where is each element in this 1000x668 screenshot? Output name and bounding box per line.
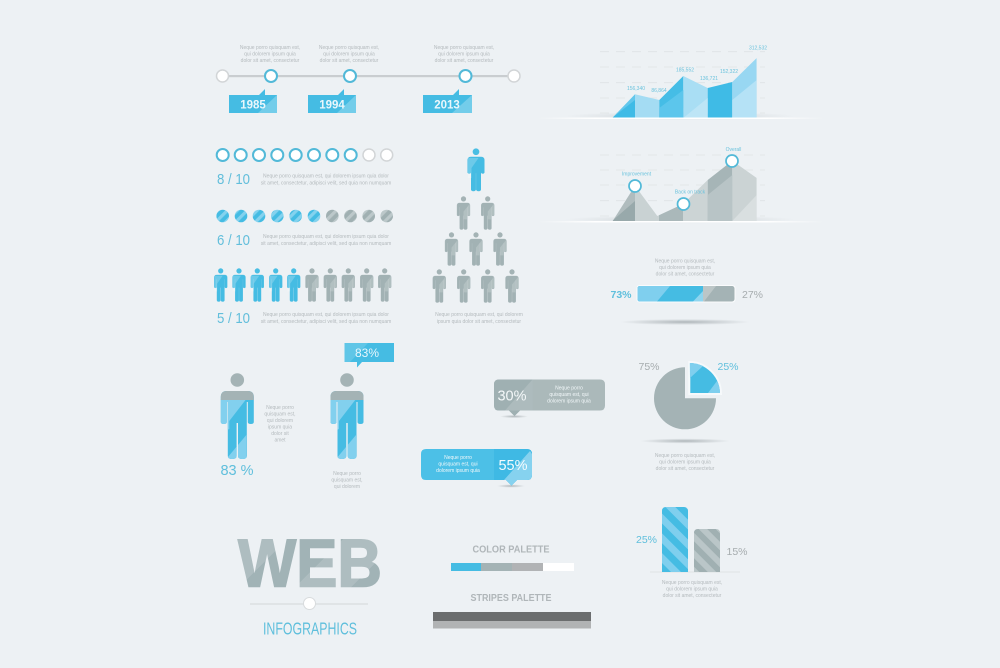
pie slice 25% <box>689 362 721 394</box>
large person with bubble <box>330 343 394 490</box>
rating: 8 of 10: sit amet, consectetur, adipisci velit, sed quia non numquam <box>261 180 391 186</box>
bar chart: 25% <box>636 534 657 546</box>
callout 30%: quisquam est, qui <box>549 392 589 398</box>
bubble 83%: 83% <box>355 346 379 360</box>
timeline text 2013: qui dolorem ipsum quia <box>438 52 490 58</box>
large person 83 percent: ipsum quia <box>268 424 292 430</box>
large person with bubble: Neque porro <box>333 471 361 477</box>
year tag 1985: 1985 <box>240 100 266 112</box>
rating: 8 of 10: 8 / 10 <box>217 171 250 188</box>
pie chart: Neque porro quisquam est, <box>655 453 715 459</box>
year tag 1994 <box>308 89 356 113</box>
year tag 2013: 2013 <box>434 100 460 112</box>
large person 83 percent: quisquam est, <box>264 412 296 418</box>
timeline <box>216 45 520 113</box>
timeline text 1985: Neque porro quisquam est, <box>240 45 300 51</box>
color palette: COLOR PALETTE <box>472 544 550 556</box>
rating: 6 of 10: sit amet, consectetur, adipisci velit, sed quia non numquam <box>261 241 391 247</box>
rating: 5 of 10 people: 5 / 10 <box>217 310 250 327</box>
large person 83 percent: 83 % <box>220 463 254 479</box>
timeline blue nodes <box>265 70 472 82</box>
chart value labels: 86,864 <box>651 88 667 94</box>
people pyramid: Neque porro quisquam est, qui dolorem <box>435 312 523 318</box>
pie chart: 75% <box>638 361 660 373</box>
timeline text 1994: dolor sit amet, consectetur <box>320 58 379 64</box>
people pyramid <box>433 148 523 325</box>
callout 55%: 55% <box>498 458 528 474</box>
large person 83 percent <box>220 373 296 479</box>
callout 30% <box>494 380 605 418</box>
callout 55%: Neque porro <box>444 455 472 461</box>
chart value labels: 312,532 <box>749 46 767 52</box>
timeline text 1985: dolor sit amet, consectetur <box>241 58 300 64</box>
large person with bubble: quisquam est, <box>331 478 363 484</box>
rating: 5 of 10 people: sit amet, consectetur, adipisci velit, sed quia non numquam <box>261 319 391 325</box>
chart marker labels: Improvement <box>622 172 652 178</box>
large person 83 percent: amet <box>274 438 286 444</box>
callout 30%: dolorem ipsum quia <box>547 398 591 404</box>
chart markers <box>629 155 738 210</box>
rating: 6 of 10: Neque porro quisquam est, qui dolorem ipsum quia dolor <box>263 234 389 240</box>
progress bar 73 / 27 <box>610 258 763 325</box>
timeline text 2013 <box>434 45 494 64</box>
callout 30%: 30% <box>497 388 527 404</box>
timeline text 1985 <box>240 45 300 64</box>
rating: 8 of 10 <box>217 149 393 188</box>
timeline text 1994: qui dolorem ipsum quia <box>323 52 375 58</box>
rating: 8 of 10: Neque porro quisquam est, qui dolorem ipsum quia dolor <box>263 174 389 180</box>
rating: 5 of 10 people <box>214 268 391 327</box>
timeline end nodes <box>216 70 520 82</box>
rating: 6 of 10 <box>216 210 393 249</box>
callout 55%: quisquam est, qui <box>438 462 478 468</box>
pie chart: dolor sit amet, consectetur <box>656 466 715 472</box>
progress bar 73 / 27: dolor sit amet, consectetur <box>656 272 715 278</box>
bubble 83% <box>344 343 394 368</box>
timeline text 1994: Neque porro quisquam est, <box>319 45 379 51</box>
chart value labels: 152,322 <box>720 69 738 75</box>
chart marker labels: Overall <box>726 147 741 153</box>
bar chart <box>636 507 748 599</box>
callout 55%: dolorem ipsum quia <box>436 468 480 474</box>
bar chart: Neque porro quisquam est, <box>662 580 722 586</box>
bar chart: 15% <box>726 546 748 558</box>
color palette <box>451 544 574 571</box>
year tag 1985 <box>229 89 277 113</box>
large person 83 percent: Neque porro <box>266 405 294 411</box>
progress bar 73 / 27: qui dolorem ipsum quia <box>659 265 711 271</box>
bar chart: qui dolorem ipsum quia <box>666 586 718 592</box>
chart value labels: 136,721 <box>700 76 718 82</box>
chart marker labels <box>622 147 741 196</box>
INFOGRAPHICS subtitle: INFOGRAPHICS <box>263 618 357 638</box>
stripes palette: STRIPES PALETTE <box>470 593 552 604</box>
stripes palette <box>433 593 591 628</box>
timeline text 1994 <box>319 45 379 64</box>
rating: 5 of 10 people: Neque porro quisquam est, qui dolorem ipsum quia dolor <box>263 312 389 318</box>
pie chart: qui dolorem ipsum quia <box>659 460 711 466</box>
WEB title: WEB <box>238 526 382 602</box>
year tag 2013 <box>423 89 472 113</box>
pie chart: 25% <box>717 361 739 373</box>
large person 83 percent: dolor sit <box>271 431 289 437</box>
slider divider <box>250 598 368 610</box>
progress bar 73 / 27: Neque porro quisquam est, <box>655 258 715 264</box>
bar chart: dolor sit amet, consectetur <box>663 593 722 599</box>
chart marker labels: Back on track <box>675 190 706 196</box>
progress bar 73 / 27: 73% <box>610 289 632 301</box>
timeline text 2013: Neque porro quisquam est, <box>434 45 494 51</box>
chart value labels: 156,340 <box>627 86 645 92</box>
gray area panels <box>612 164 756 221</box>
chart shadow and baseline <box>538 112 824 120</box>
chart value labels <box>627 46 767 94</box>
area chart: blue <box>565 46 797 119</box>
people pyramid: ipsum quia dolor sit amet, consectetur <box>437 319 521 325</box>
progress bar 73 / 27: 27% <box>742 289 763 301</box>
chart value labels: 185,552 <box>676 68 694 74</box>
area chart: gray <box>565 147 797 222</box>
blue area panels <box>612 58 757 118</box>
pie chart <box>638 361 739 472</box>
callout 55% <box>421 449 532 488</box>
year tag 1994: 1994 <box>319 100 345 112</box>
chart shadow and baseline <box>538 216 824 224</box>
callout 30%: Neque porro <box>555 386 583 392</box>
timeline text 1985: qui dolorem ipsum quia <box>244 52 296 58</box>
large person 83 percent: qui dolorem <box>267 418 293 424</box>
rating: 6 of 10: 6 / 10 <box>217 232 250 249</box>
timeline text 2013: dolor sit amet, consectetur <box>435 58 494 64</box>
large person with bubble: qui dolorem <box>334 484 360 490</box>
